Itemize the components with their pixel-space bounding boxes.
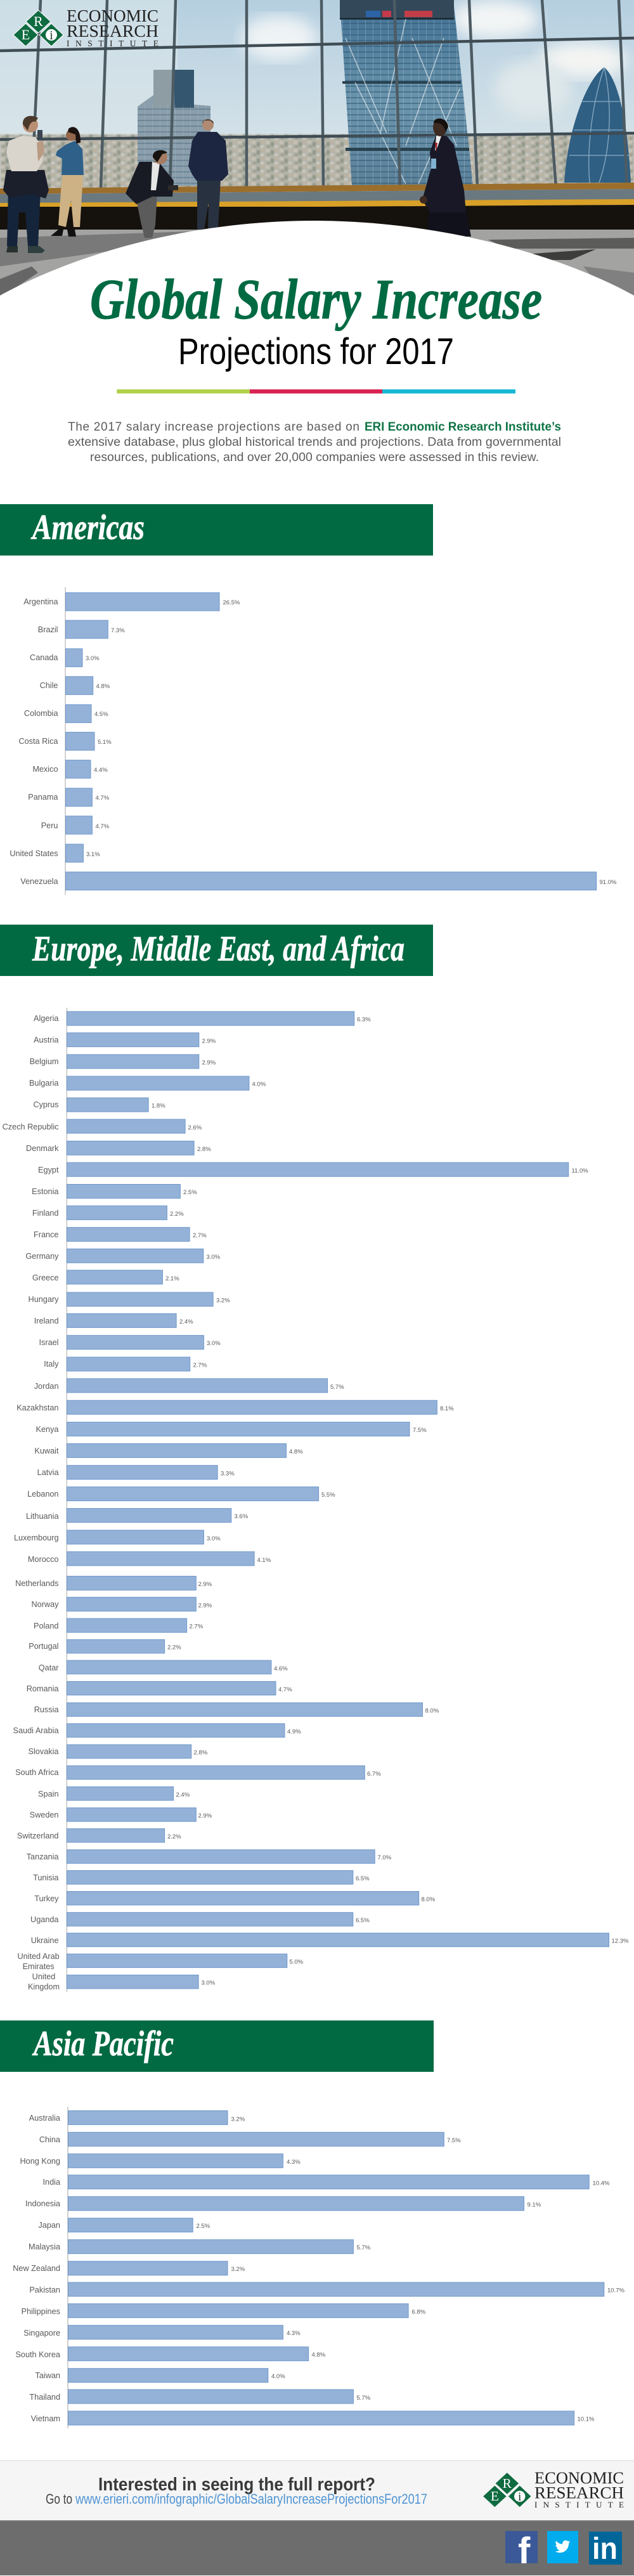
bar: Turkey: Turkey — [34, 1894, 59, 1903]
bar: Colombia — [24, 705, 108, 723]
bar: Indonesia: 9.1% — [527, 2202, 541, 2208]
bar: Morocco: Morocco — [28, 1555, 58, 1564]
bar: Malaysia — [29, 2240, 371, 2254]
bar chart: Americas — [10, 587, 617, 895]
report link: Go to — [46, 2491, 72, 2507]
bar: Israel: Israel — [39, 1338, 58, 1347]
bar: Singapore: Singapore — [23, 2329, 60, 2338]
bar: Czech Republic — [3, 1119, 202, 1133]
bar: Costa Rica: Costa Rica — [18, 737, 58, 746]
bar: United States: United States — [10, 849, 58, 858]
bar: Ireland — [34, 1313, 193, 1327]
logo: Economic Research Institute (footer): RESEARCH — [534, 2483, 624, 2502]
bar: Russia: 8.0% — [425, 1707, 439, 1715]
bar: Tanzania: 7.0% — [378, 1854, 392, 1861]
person: walking man in dark suit — [420, 119, 471, 237]
bar: Australia — [29, 2111, 245, 2124]
bar: Slovakia: 2.8% — [194, 1749, 208, 1757]
bar: Bulgaria — [29, 1076, 266, 1090]
bar: Panama — [28, 788, 110, 806]
bar: India: India — [42, 2178, 61, 2187]
bar: Latvia: Latvia — [37, 1468, 59, 1477]
bar: Tunisia — [33, 1871, 370, 1884]
bar: Switzerland: 2.2% — [167, 1833, 181, 1840]
intro paragraph: ERI Economic Research Institute’s — [365, 420, 561, 434]
bar: Philippines: 6.8% — [412, 2308, 426, 2316]
social media bar — [0, 2520, 634, 2575]
tricolor divider — [117, 389, 515, 393]
bar: Ireland: Ireland — [34, 1317, 58, 1325]
bar: Mexico: Mexico — [32, 765, 58, 774]
bar: Italy: Italy — [44, 1360, 59, 1369]
bar: Tunisia: 6.5% — [356, 1875, 370, 1882]
bar: Malaysia: 5.7% — [356, 2244, 371, 2251]
bar: United Kingdom: Kingdom — [28, 1982, 60, 1991]
bar: China: 7.5% — [447, 2137, 461, 2144]
bar: Saudi Arabia: Saudi Arabia — [13, 1726, 59, 1735]
bar: Saudi Arabia: 4.9% — [287, 1729, 301, 1735]
bar chart: Asia Pacific — [13, 2107, 624, 2428]
bar: Ukraine: Ukraine — [31, 1936, 58, 1945]
bar: Poland: 2.7% — [189, 1623, 204, 1630]
bar: Israel: 3.0% — [207, 1340, 221, 1347]
bar: Austria: 2.9% — [202, 1038, 216, 1045]
bar: Canada: 3.0% — [86, 655, 100, 662]
bar: Estonia: 2.5% — [183, 1189, 197, 1196]
bar: Estonia: Estonia — [32, 1187, 59, 1196]
section banner: Asia Pacific — [0, 2020, 434, 2072]
bar: Costa Rica — [18, 732, 112, 750]
bar: Poland — [34, 1618, 204, 1632]
bar: Austria: Austria — [34, 1036, 59, 1044]
bar: Ukraine — [31, 1933, 629, 1947]
icon: Facebook: f — [518, 2530, 531, 2572]
bar: United Arab Emirates — [17, 1952, 304, 1971]
call-to-action heading: Interested in seeing the full report? — [98, 2475, 375, 2495]
bar: China — [39, 2132, 461, 2146]
bar: Kuwait — [34, 1443, 303, 1457]
bar: Lithuania — [26, 1509, 249, 1523]
bar: Lebanon — [27, 1487, 335, 1501]
person: man in white t-shirt — [3, 116, 49, 253]
bar: Brazil: Brazil — [38, 625, 58, 634]
logo: Economic Research Institute (footer) — [482, 2469, 624, 2509]
bar: United Kingdom — [28, 1972, 216, 1991]
section banner: Americas: Americas — [31, 508, 145, 547]
bar: Taiwan — [36, 2369, 285, 2383]
bar: Greece: 2.1% — [165, 1275, 179, 1282]
bar: Uganda: 6.5% — [356, 1917, 370, 1924]
bar: Czech Republic: Czech Republic — [3, 1122, 59, 1131]
bar: Uganda: Uganda — [30, 1915, 59, 1924]
bar: Canada — [30, 649, 100, 667]
bar: Vietnam — [31, 2411, 595, 2425]
icon: Twitter — [547, 2531, 578, 2563]
logo: Economic Research Institute (footer): INSTITUTE — [534, 2500, 624, 2509]
bar: Brazil: 7.3% — [111, 627, 125, 634]
bar: Qatar — [39, 1660, 288, 1674]
bar: South Africa: South Africa — [15, 1768, 59, 1777]
bar: Japan — [38, 2218, 210, 2232]
bar: Denmark — [26, 1141, 211, 1155]
bar: Portugal: Portugal — [29, 1642, 58, 1651]
bar: Costa Rica: 5.1% — [98, 739, 112, 746]
bar: Finland: Finland — [32, 1209, 58, 1218]
bar: Russia — [34, 1703, 439, 1716]
bar: Taiwan: 4.0% — [271, 2373, 285, 2380]
bar: France — [34, 1227, 207, 1241]
bar: Slovakia — [29, 1745, 208, 1759]
bar: Panama: 4.7% — [95, 795, 110, 802]
bar: Thailand: 5.7% — [356, 2395, 371, 2402]
bar: France: France — [34, 1230, 58, 1239]
bar: Chile — [40, 677, 110, 694]
intro paragraph: extensive database, plus global historical trends and projections. Data from governmental — [68, 436, 561, 449]
bar: United Kingdom: 3.0% — [202, 1980, 216, 1986]
bar: Malaysia: Malaysia — [29, 2242, 61, 2251]
bar: Chile: Chile — [40, 681, 58, 690]
bar: Morocco: 4.1% — [257, 1557, 271, 1564]
logo: Economic Research Institute (header): ECONOMIC — [67, 6, 158, 25]
icon: LinkedIn: in — [592, 2532, 618, 2566]
title: Global Salary Increase — [90, 268, 542, 331]
bar: Luxembourg: Luxembourg — [14, 1533, 58, 1542]
bar: Venezuela: Venezuela — [20, 877, 58, 886]
bar: United Arab Emirates: United Arab — [17, 1952, 60, 1961]
bar: Germany: Germany — [25, 1252, 59, 1261]
bar: Spain — [38, 1787, 190, 1800]
bar: Lebanon: 5.5% — [321, 1492, 335, 1499]
bar: Greece: Greece — [32, 1273, 58, 1282]
intro paragraph — [68, 420, 561, 464]
bar: Pakistan: Pakistan — [29, 2286, 60, 2294]
bar: Tanzania — [27, 1850, 392, 1863]
bar: Cyprus: Cyprus — [33, 1100, 58, 1109]
bar: Luxembourg — [14, 1530, 221, 1544]
bar: United Arab Emirates: Emirates — [23, 1962, 55, 1971]
bar: Spain: 2.4% — [176, 1792, 190, 1799]
logo: Economic Research Institute (header): E — [22, 27, 30, 42]
bar: Netherlands: 2.9% — [198, 1581, 212, 1588]
bar: Kuwait: Kuwait — [34, 1447, 59, 1455]
bar: New Zealand: 3.2% — [231, 2266, 245, 2273]
icon: Facebook — [505, 2530, 538, 2572]
bar: Vietnam: Vietnam — [31, 2414, 60, 2423]
bar: Algeria — [34, 1012, 371, 1025]
bar: Belgium: 2.9% — [202, 1059, 216, 1067]
bar: Switzerland — [17, 1829, 181, 1842]
bar: Peru — [41, 816, 110, 834]
bar: Germany: 3.0% — [207, 1254, 221, 1261]
logo: Economic Research Institute (header): i — [49, 29, 53, 42]
bar: Turkey — [34, 1891, 436, 1905]
bar: Norway — [31, 1597, 212, 1611]
bar: New Zealand — [13, 2261, 245, 2275]
logo: Economic Research Institute (header): INSTITUTE — [67, 39, 158, 48]
bar: Hong Kong: 4.3% — [287, 2159, 301, 2166]
section banner: Europe, Middle East, and Africa: Europe, Middle East, and Africa — [32, 930, 404, 969]
bar: India — [42, 2175, 610, 2189]
bar: Mexico: 4.4% — [94, 767, 108, 774]
bar: Sweden — [30, 1808, 212, 1821]
bar: Thailand — [29, 2390, 371, 2404]
bar: Poland: Poland — [34, 1622, 58, 1630]
bar: Hong Kong — [20, 2154, 301, 2168]
bar: Thailand: Thailand — [29, 2393, 60, 2402]
logo: Economic Research Institute (header): RESEARCH — [67, 22, 158, 41]
bar: Spain: Spain — [38, 1790, 58, 1799]
bar: Bulgaria: Bulgaria — [29, 1079, 59, 1088]
bar: Philippines — [22, 2304, 426, 2318]
bar: Cyprus: 1.8% — [152, 1102, 165, 1110]
bar: Netherlands — [15, 1576, 212, 1590]
section banner: Americas — [0, 504, 433, 556]
bar: France: 2.7% — [193, 1232, 207, 1239]
bar: Peru: 4.7% — [95, 823, 110, 830]
bar: Algeria: 6.3% — [357, 1016, 371, 1024]
bar: Norway: 2.9% — [198, 1602, 212, 1610]
bar: Singapore — [23, 2326, 301, 2339]
bar: Egypt: Egypt — [38, 1166, 59, 1174]
bar: Colombia: 4.5% — [94, 711, 108, 718]
bar: Australia: Australia — [29, 2114, 61, 2123]
bar: Lithuania: 3.6% — [235, 1513, 249, 1520]
logo: Economic Research Institute (footer): E — [491, 2488, 499, 2504]
bar: Indonesia: Indonesia — [25, 2199, 61, 2208]
bar: Venezuela: 91.0% — [600, 879, 617, 886]
bar: Pakistan: 10.7% — [607, 2287, 624, 2294]
bar: Singapore: 4.3% — [287, 2330, 301, 2337]
bar: Australia: 3.2% — [231, 2116, 245, 2123]
person: standing man seen from behind — [188, 119, 228, 230]
bar: South Africa: 6.7% — [367, 1771, 381, 1778]
bar: United Kingdom: United — [32, 1972, 55, 1981]
bar: Panama: Panama — [28, 793, 58, 802]
white curved title panel — [0, 221, 634, 304]
bar: Kenya: 7.5% — [413, 1427, 427, 1434]
bar: Argentina: 26.5% — [223, 599, 240, 606]
bar: China: China — [39, 2135, 61, 2144]
bar: Colombia: Colombia — [24, 709, 58, 718]
bar: Denmark: Denmark — [26, 1144, 59, 1153]
bar: Denmark: 2.8% — [197, 1146, 211, 1153]
bar: Greece — [32, 1270, 179, 1284]
bar: Philippines: Philippines — [22, 2307, 60, 2316]
bar: Qatar: 4.6% — [274, 1665, 288, 1672]
bar: Netherlands: Netherlands — [15, 1579, 58, 1588]
bar: Hong Kong: Hong Kong — [20, 2157, 60, 2166]
bar: Cyprus — [33, 1098, 165, 1112]
bar: Jordan — [34, 1379, 344, 1393]
bar: South Africa — [15, 1766, 381, 1779]
hero photo: office overlooking the city — [0, 0, 634, 299]
logo: Economic Research Institute (footer): R — [503, 2476, 512, 2491]
logo: Economic Research Institute (footer): i — [518, 2490, 522, 2504]
bar: Peru: Peru — [41, 821, 58, 830]
bar: Kuwait: 4.8% — [289, 1448, 303, 1455]
bar: Russia: Russia — [34, 1705, 59, 1714]
bar: Finland: 2.2% — [170, 1211, 184, 1218]
bar: United States: 3.1% — [86, 851, 100, 858]
bar: Japan: Japan — [38, 2221, 60, 2230]
bar: Canada: Canada — [30, 653, 58, 662]
bar: Uganda — [30, 1913, 370, 1926]
bar: Kazakhstan: Kazakhstan — [16, 1403, 58, 1412]
report link: www.erieri.com/infographic/GlobalSalaryIncreaseProjectionsFor2017 — [75, 2491, 427, 2507]
bar: Tanzania: Tanzania — [27, 1852, 59, 1861]
bar: Egypt — [38, 1162, 588, 1176]
bar: Italy: 2.7% — [193, 1362, 207, 1369]
bar: Norway: Norway — [31, 1600, 59, 1609]
bar: Japan: 2.5% — [197, 2223, 210, 2230]
bar: Czech Republic: 2.6% — [188, 1124, 202, 1131]
logo: Economic Research Institute (header): R — [34, 13, 43, 29]
bar: United Arab Emirates: 5.0% — [289, 1958, 304, 1966]
bar: Hungary: 3.2% — [216, 1298, 230, 1304]
bar: Slovakia: Slovakia — [29, 1747, 59, 1756]
bar: Venezuela — [20, 872, 617, 890]
bar: Argentina: Argentina — [23, 597, 58, 606]
subtitle: Projections for 2017 — [178, 331, 454, 372]
bar: South Korea: South Korea — [15, 2350, 61, 2359]
bar: Hungary: Hungary — [29, 1295, 59, 1304]
bar: Italy — [44, 1357, 207, 1371]
intro paragraph: The 2017 salary increase projections are based on — [68, 420, 359, 434]
bar: Ireland: 2.4% — [179, 1318, 193, 1325]
bar: Chile: 4.8% — [96, 683, 110, 690]
bar: Bulgaria: 4.0% — [252, 1081, 266, 1088]
person: seated man in suit — [126, 150, 178, 238]
bar: Belgium — [30, 1055, 216, 1069]
bar: New Zealand: New Zealand — [13, 2264, 60, 2273]
section banner: Asia Pacific: Asia Pacific — [32, 2024, 174, 2064]
bar: Latvia: 3.3% — [221, 1470, 235, 1478]
bar: Jordan: Jordan — [34, 1382, 58, 1391]
bar: South Korea — [15, 2347, 326, 2361]
bar: Finland — [32, 1206, 184, 1220]
bar: Kenya — [36, 1422, 427, 1436]
intro paragraph: resources, publications, and over 20,000 companies were assessed in this review. — [90, 451, 539, 464]
logo: Economic Research Institute (header) — [13, 6, 158, 48]
bar: United States — [10, 844, 100, 862]
bar: South Korea: 4.8% — [312, 2352, 326, 2358]
bar: Germany — [25, 1249, 221, 1263]
person: woman in denim jacket — [51, 127, 84, 237]
bar: Portugal: 2.2% — [167, 1644, 181, 1651]
bar: Kazakhstan — [16, 1400, 454, 1414]
bar: Egypt: 11.0% — [572, 1168, 588, 1174]
bar: Turkey: 8.0% — [421, 1896, 436, 1903]
bar: Israel — [39, 1336, 221, 1350]
bar: Romania — [27, 1681, 292, 1695]
footer call-to-action panel — [0, 2460, 634, 2520]
bar: Portugal — [29, 1639, 181, 1653]
bar: Latvia — [37, 1466, 235, 1480]
bar: Tunisia: Tunisia — [33, 1873, 59, 1882]
logo: Economic Research Institute (footer): ECONOMIC — [534, 2469, 624, 2487]
bar: Romania: Romania — [27, 1684, 59, 1693]
bar: India: 10.4% — [592, 2180, 610, 2187]
bar: Taiwan: Taiwan — [36, 2371, 60, 2380]
bar: Romania: 4.7% — [278, 1686, 292, 1693]
bar: Jordan: 5.7% — [330, 1384, 344, 1391]
bar: Vietnam: 10.1% — [577, 2416, 595, 2423]
bar: Ukraine: 12.3% — [611, 1938, 629, 1944]
bar: Switzerland: Switzerland — [17, 1831, 58, 1840]
bar: Mexico — [32, 760, 108, 778]
bar: Pakistan — [29, 2282, 624, 2296]
bar: Estonia — [32, 1185, 197, 1199]
bar: Kazakhstan: 8.1% — [440, 1405, 454, 1412]
bar: Kenya: Kenya — [36, 1425, 59, 1434]
bar: Lithuania: Lithuania — [26, 1512, 59, 1521]
bar: Sweden: 2.9% — [198, 1812, 212, 1819]
bar chart: Europe, Middle East, and Africa — [3, 1008, 629, 1992]
bar: Lebanon: Lebanon — [27, 1490, 58, 1499]
bar: Belgium: Belgium — [30, 1057, 58, 1066]
section banner: Europe, Middle East, and Africa — [0, 925, 433, 976]
bar: Algeria: Algeria — [34, 1014, 59, 1023]
bar: Argentina — [23, 593, 240, 611]
bar: Hungary — [29, 1292, 230, 1306]
bar: Qatar: Qatar — [39, 1663, 59, 1672]
bar: Luxembourg: 3.0% — [207, 1535, 221, 1542]
bar: Austria — [34, 1033, 216, 1047]
bar: Morocco — [28, 1552, 271, 1566]
bar: Brazil — [38, 620, 125, 639]
bar: Sweden: Sweden — [30, 1811, 58, 1819]
bar: Indonesia — [25, 2197, 541, 2211]
bar: Saudi Arabia — [13, 1724, 301, 1737]
